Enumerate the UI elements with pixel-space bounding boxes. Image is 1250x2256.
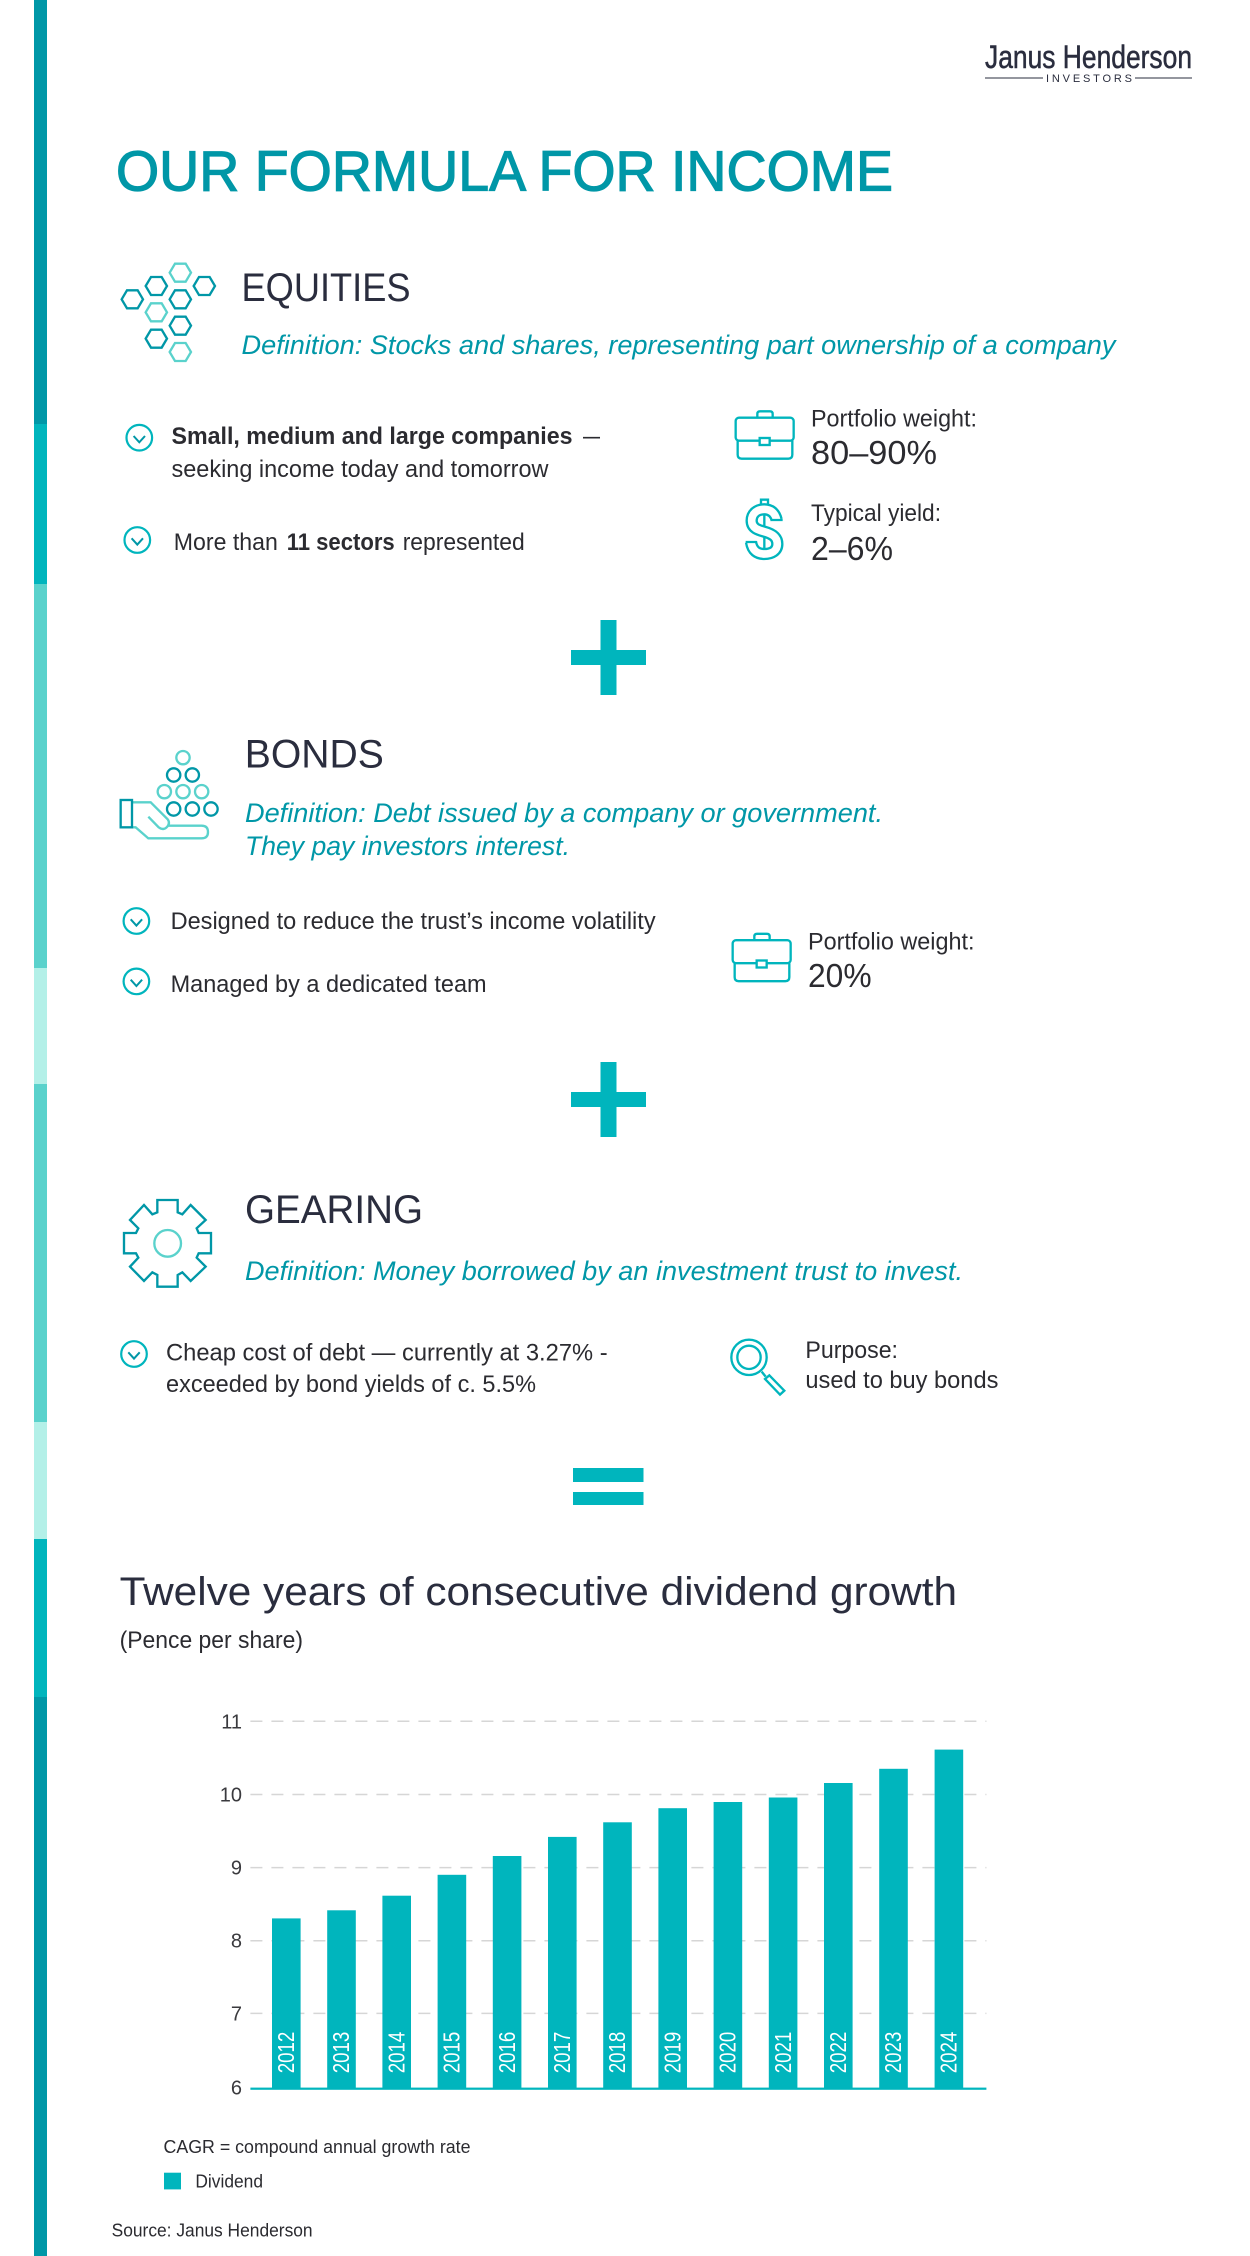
stat: portfolio weight: 20%	[808, 957, 872, 994]
stat: portfolio weight: Portfolio weight:	[811, 406, 977, 433]
bar: 2019: 2019	[659, 2032, 685, 2073]
bar: 2024: 2024	[936, 2032, 962, 2073]
bullet: company sizes	[172, 423, 600, 483]
heading: bonds: BONDS	[245, 732, 384, 776]
bullet: sectors: 11 sectors	[287, 529, 395, 556]
bar chart: dividend	[220, 1711, 986, 2100]
bar: 2016: 2016	[494, 2032, 520, 2073]
bar: 2018: 2018	[604, 2032, 630, 2073]
stat: portfolio weight	[811, 406, 977, 471]
bar: 2023	[879, 1769, 908, 2088]
bar: 2022: 2022	[825, 2032, 851, 2073]
bullet: sectors	[174, 529, 525, 556]
chart heading: Twelve years of consecutive dividend growth	[120, 1570, 957, 1614]
chart subtitle: (Pence per share)	[120, 1627, 303, 1654]
bar: 2019	[658, 1808, 687, 2088]
icon: briefcase	[733, 934, 791, 981]
y axis labels	[220, 1711, 242, 2100]
bar: 2020	[714, 1802, 742, 2088]
y axis labels: 8	[231, 1931, 242, 1953]
bullet: cost of debt	[166, 1340, 608, 1398]
equals sign	[573, 1468, 644, 1505]
panel: bonds	[121, 732, 974, 998]
stat: typical yield: Typical yield:	[811, 500, 941, 527]
stat: portfolio weight: 80–90%	[811, 434, 937, 471]
bar: 2021: 2021	[770, 2032, 796, 2073]
bar: 2014	[382, 1896, 411, 2089]
icon: hand with coins	[121, 751, 218, 838]
legend: dividend: Dividend	[195, 2172, 263, 2192]
source: Source: Janus Henderson	[112, 2220, 313, 2240]
bar: 2017	[548, 1837, 577, 2088]
bar: 2012	[272, 1918, 301, 2088]
bar: 2013	[327, 1910, 356, 2088]
bullet: cost of debt: exceeded by bond yields of c. 5.5%	[166, 1371, 536, 1398]
stat: typical yield	[811, 500, 941, 567]
purpose text	[805, 1337, 998, 1394]
check icon	[124, 527, 150, 553]
logo: Janus Henderson Investors: INVESTORS	[1046, 73, 1132, 85]
bar: 2023: 2023	[880, 2032, 906, 2073]
check icon	[124, 908, 149, 934]
icon: hexagons	[122, 264, 215, 361]
bullet: cost of debt: Cheap cost of debt — currently at 3.27% -	[166, 1340, 608, 1367]
bullet: company sizes: Small, medium and large companies	[172, 423, 572, 450]
bullet: sectors: represented	[403, 529, 525, 556]
check icon	[121, 1341, 147, 1367]
definition: equities: Definition: Stocks and shares, representing part ownership of a company	[242, 330, 1117, 360]
bar: 2012: 2012	[273, 2032, 299, 2073]
plus sign	[571, 620, 646, 695]
purpose text: Purpose:	[805, 1337, 898, 1364]
panel: equities	[122, 264, 1117, 567]
check icon	[124, 969, 149, 994]
y axis labels: 10	[220, 1784, 242, 1806]
note: CAGR: CAGR = compound annual growth rate	[164, 2137, 470, 2157]
definition: bonds	[245, 798, 883, 861]
bar: 2022	[824, 1783, 853, 2088]
x axis line	[250, 2088, 986, 2090]
heading: gearing: GEARING	[245, 1188, 423, 1232]
check icon	[126, 425, 152, 451]
y axis labels: 7	[231, 2004, 242, 2026]
stat: portfolio weight	[808, 929, 974, 994]
bullet: dedicated team: Managed by a dedicated team	[171, 971, 487, 998]
bullet: company sizes: seeking income today and tomorrow	[172, 456, 549, 483]
heading: equities: EQUITIES	[242, 266, 410, 310]
title: OUR FORMULA FOR INCOME	[116, 140, 893, 204]
purpose text: used to buy bonds	[805, 1367, 998, 1394]
bullet: volatility: Designed to reduce the trust’s income volatility	[171, 908, 656, 935]
definition: bonds: Definition: Debt issued by a company or government.	[245, 798, 883, 828]
bar: 2018	[603, 1822, 632, 2088]
bar: 2014: 2014	[383, 2032, 409, 2073]
bullet: company sizes: —	[583, 423, 600, 450]
stat: typical yield: 2–6%	[811, 530, 893, 567]
stat: portfolio weight: Portfolio weight:	[808, 929, 974, 956]
y axis labels: 6	[231, 2078, 242, 2100]
icon: briefcase	[736, 411, 794, 459]
bar: 2015: 2015	[439, 2032, 465, 2073]
definition: gearing: Definition: Money borrowed by an investment trust to invest.	[245, 1256, 963, 1286]
bar: 2024	[935, 1750, 963, 2088]
bar: 2020: 2020	[715, 2032, 741, 2073]
icon: gear	[124, 1200, 211, 1287]
bullet: sectors: More than	[174, 529, 278, 556]
definition: bonds: They pay investors interest.	[245, 831, 570, 861]
y axis labels: 9	[231, 1858, 242, 1880]
bar: 2016	[493, 1856, 521, 2088]
bar: 2021	[769, 1798, 797, 2088]
left colour strip	[34, 0, 47, 2256]
logo: Janus Henderson Investors	[985, 39, 1192, 85]
bar: 2015	[438, 1875, 466, 2089]
y axis labels: 11	[221, 1711, 242, 1733]
icon: dollar sign	[746, 500, 783, 558]
panel: gearing	[121, 1188, 998, 1398]
bar: 2017: 2017	[549, 2032, 575, 2073]
icon: magnifying glass	[731, 1340, 784, 1395]
logo: Janus Henderson Investors: Janus Henderson	[985, 39, 1192, 75]
legend: dividend	[164, 2172, 263, 2192]
bar: 2013: 2013	[328, 2032, 354, 2073]
plus sign	[571, 1062, 646, 1137]
